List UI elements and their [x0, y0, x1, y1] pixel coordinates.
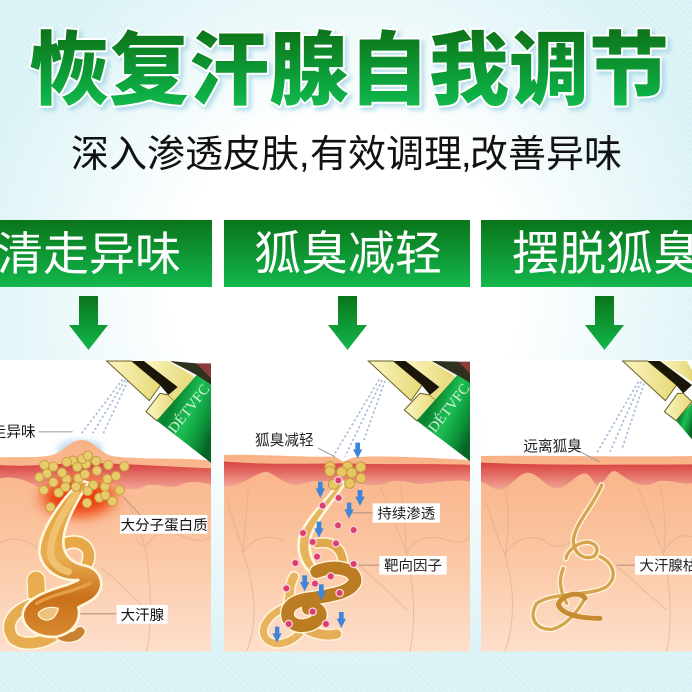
- protein cells: [35, 451, 129, 512]
- label: clear odor: [0, 424, 73, 438]
- veins: [485, 485, 692, 652]
- label: apocrine gland: 大汗腺: [121, 607, 165, 624]
- step banner 1: 清走异味: [0, 228, 181, 280]
- bottle: [368, 361, 473, 462]
- step banner 2: [224, 220, 470, 287]
- arrow 3: [585, 296, 624, 350]
- shrunken gland: [533, 485, 613, 629]
- subtitle: ,: [461, 134, 472, 176]
- targeting factors: [283, 477, 357, 628]
- subtitle: 有效调理: [310, 134, 462, 176]
- label: macromolecular protein: [120, 497, 208, 534]
- label: away from odor: [523, 438, 599, 462]
- spray: [597, 382, 644, 453]
- bottle: DÉTVFC: [425, 380, 473, 436]
- spray: [335, 379, 385, 457]
- label: odor reduced: [255, 432, 335, 457]
- penetration arrows: [272, 443, 365, 643]
- subtitle: 深入渗透皮肤: [71, 134, 299, 176]
- arrow 1: [69, 296, 108, 350]
- panel: odor reduced: [224, 360, 473, 652]
- skin layers: [224, 455, 470, 652]
- panel: clear odor: [0, 360, 213, 652]
- skin halo: [57, 439, 103, 459]
- remaining cells: [325, 462, 366, 489]
- panel: free of odor: [481, 360, 692, 652]
- title: 恢复汗腺自我调节: [29, 26, 669, 115]
- label: targeting factor: 靶向因子: [384, 558, 442, 575]
- step banner 1: [0, 220, 212, 287]
- shrunken gland: [263, 481, 355, 644]
- bottle: [623, 361, 692, 439]
- subtitle: 改善异味: [470, 134, 622, 176]
- bottle: [107, 361, 213, 463]
- sweat gland: [9, 481, 101, 643]
- label: gland shrinks: [617, 556, 692, 575]
- subtitle: ,: [299, 134, 310, 176]
- label: apocrine gland: [80, 605, 168, 624]
- label: continuous penetration: 持续渗透: [377, 505, 436, 522]
- skin layers: [0, 440, 211, 652]
- label: macromolecular protein: 大分子蛋白质: [121, 517, 208, 534]
- step banner 3: [481, 220, 692, 287]
- veins: [227, 483, 470, 652]
- label: targeting factor: [358, 556, 447, 575]
- skin layers: [481, 456, 692, 652]
- veins: [0, 497, 211, 652]
- label: continuous penetration: [352, 503, 440, 523]
- arrow 2: [328, 296, 367, 350]
- label: away from odor: 远离狐臭: [523, 438, 582, 455]
- step banner 2: 狐臭减轻: [254, 227, 442, 280]
- label: odor reduced: 狐臭减轻: [255, 432, 314, 449]
- bottle: DÉTVFC: [165, 381, 213, 436]
- spray: [82, 379, 128, 433]
